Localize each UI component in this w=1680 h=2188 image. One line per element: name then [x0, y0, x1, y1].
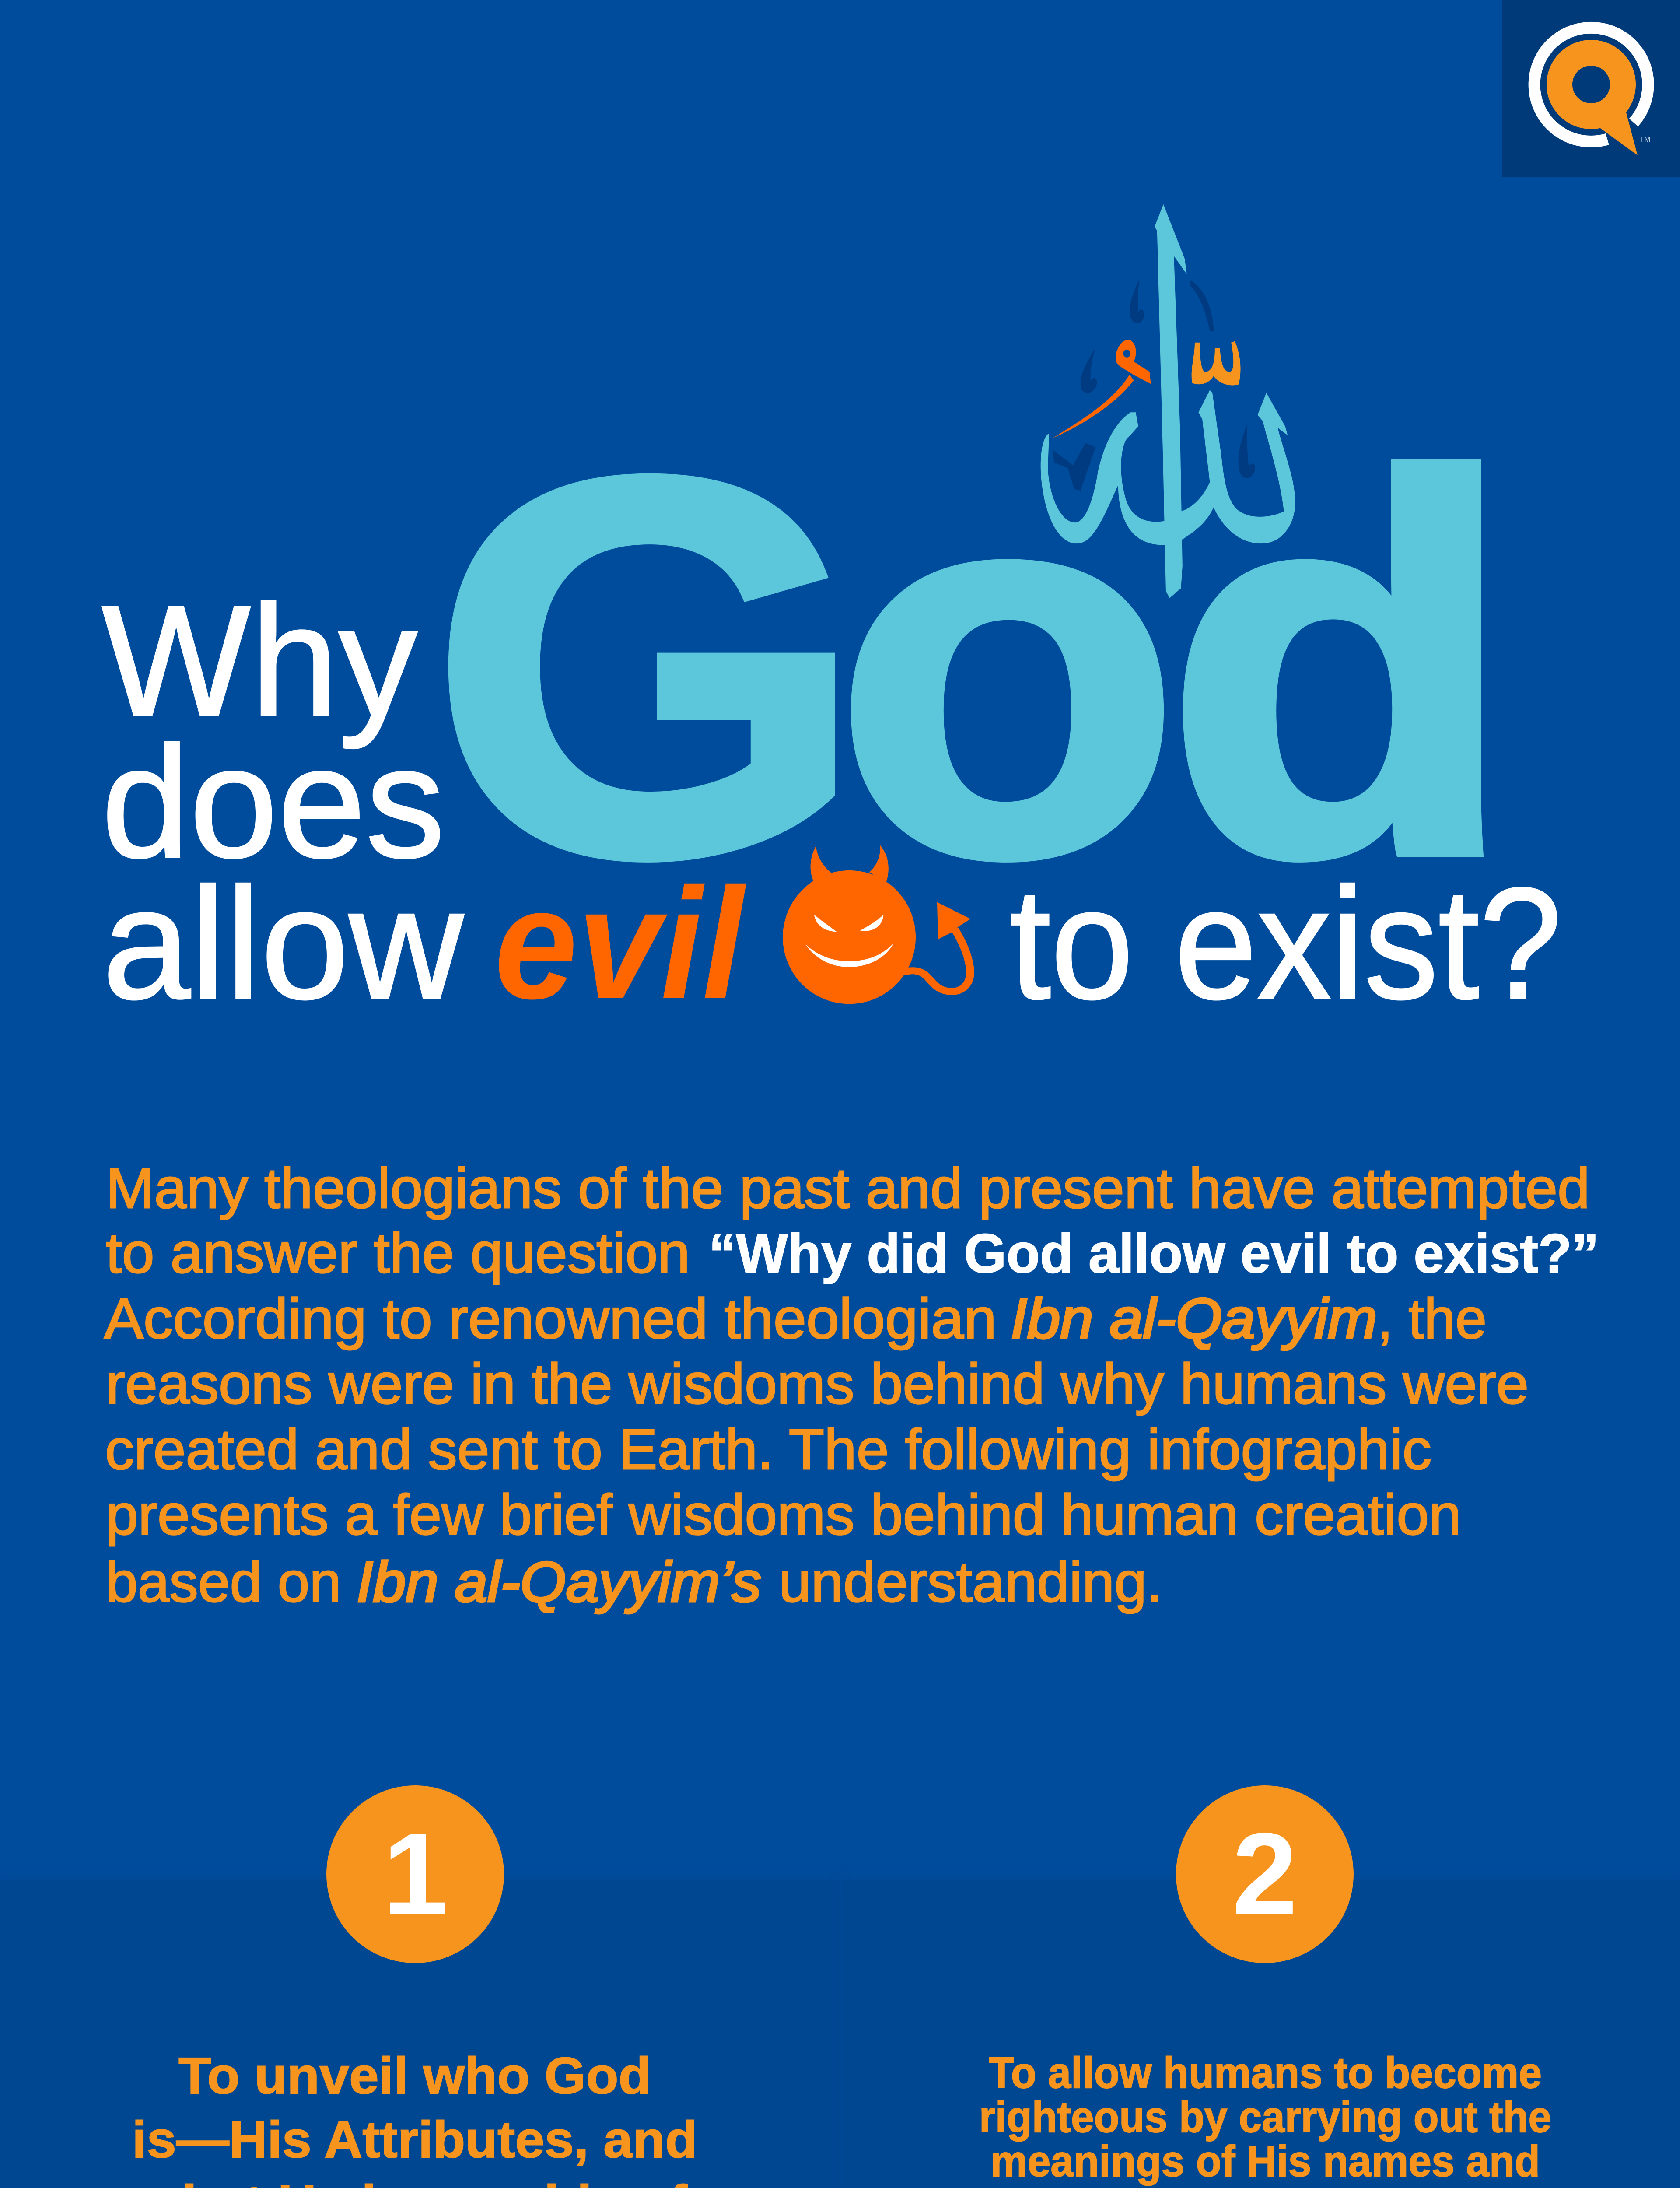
- title line: to exist?: to exist?: [1010, 855, 1562, 1032]
- heading: wisdom 1: is—His Attributes, and: [132, 2111, 697, 2169]
- title word: God: G: [431, 368, 864, 965]
- heading: wisdom 2: meanings of His names and: [990, 2137, 1540, 2186]
- heading: wisdom 1: To unveil who God: [178, 2047, 651, 2105]
- title word: God: [431, 368, 1516, 965]
- intro paragraph: reasons were in the wisdoms behind why humans were: [106, 1352, 1529, 1416]
- badge: number 2: [1176, 1785, 1354, 1963]
- heading: wisdom 2: [979, 2048, 1551, 2188]
- badge: number 1: [326, 1785, 504, 1963]
- title word: God: o: [834, 368, 1180, 965]
- intro paragraph: “Why did God allow evil to exist?”: [709, 1223, 1599, 1284]
- intro paragraph: [104, 1156, 1599, 1614]
- panel: wisdom 1: [0, 1785, 840, 2188]
- badge: number 1: 1: [382, 1808, 448, 1939]
- badge: number 2: 2: [1232, 1808, 1298, 1939]
- intro paragraph: understanding.: [779, 1550, 1163, 1614]
- heading: wisdom 2: righteous by carrying out the: [979, 2093, 1551, 2142]
- logo badge: [1502, 0, 1680, 177]
- intro paragraph: Ibn al-Qayyim’s: [357, 1550, 761, 1614]
- intro paragraph: , the: [1377, 1287, 1487, 1350]
- logo badge: TM: [1640, 135, 1651, 144]
- icon: Allah calligraphy: [1041, 204, 1295, 598]
- intro paragraph: to answer the question: [106, 1221, 690, 1285]
- title word: God: d: [1165, 368, 1516, 965]
- intro paragraph: According to renowned theologian: [104, 1287, 997, 1350]
- title word: evil: evil: [494, 855, 747, 1032]
- title line: Why: Why: [102, 572, 417, 750]
- intro paragraph: created and sent to Earth. The following infographic: [105, 1417, 1432, 1481]
- heading: wisdom 1: [132, 2047, 703, 2188]
- intro paragraph: Many theologians of the past and present have attempted: [106, 1156, 1590, 1220]
- intro paragraph: Ibn al-Qayyim: [1011, 1287, 1377, 1350]
- panel: wisdom 2: [842, 1785, 1680, 2188]
- title: [102, 368, 1562, 1032]
- heading: wisdom 2: To allow humans to become: [989, 2048, 1542, 2097]
- title line: allow: allow: [102, 855, 465, 1032]
- intro paragraph: presents a few brief wisdoms behind human creation: [106, 1483, 1461, 1546]
- intro paragraph: based on: [106, 1550, 341, 1614]
- icon: devil face: [783, 845, 971, 1004]
- title line: does: does: [102, 713, 445, 891]
